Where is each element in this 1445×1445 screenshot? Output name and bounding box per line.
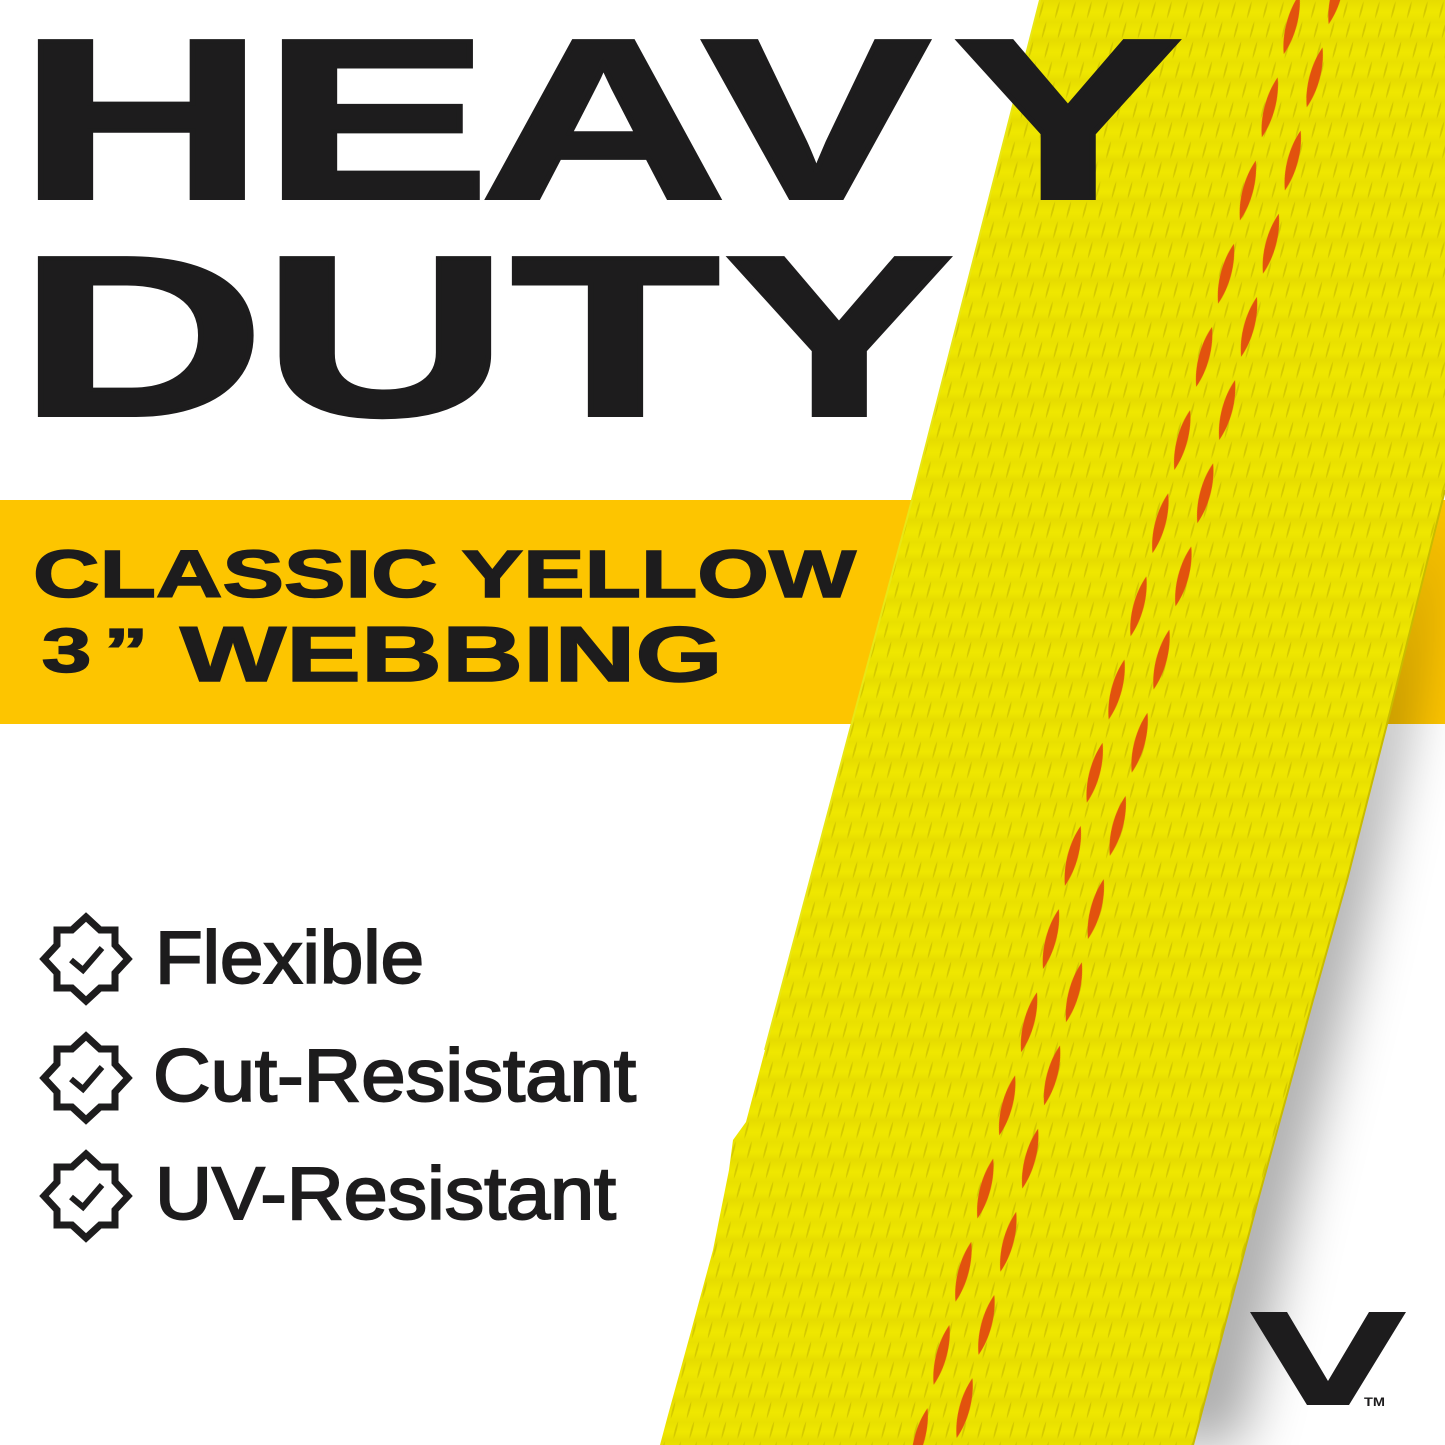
logo: V mark	[1250, 1312, 1406, 1405]
strap right edge	[1193, 490, 1445, 1445]
banner heading: 3 inch webbing: WEBBING	[180, 611, 723, 698]
trademark: TM	[1364, 1395, 1385, 1409]
label: UV-Resistant	[155, 1152, 616, 1235]
orange stitch line right	[935, 0, 1348, 1445]
icon: check badge	[44, 1036, 128, 1120]
icon: check badge	[44, 917, 128, 1001]
strap drop shadow	[1150, 490, 1445, 1445]
yellow banner background	[0, 500, 1445, 724]
feature: Flexible	[44, 916, 424, 1001]
label: Cut-Resistant	[153, 1034, 636, 1117]
feature: Cut-Resistant	[44, 1034, 636, 1120]
yellow webbing strap	[660, 0, 1445, 1445]
strap left edge highlight	[765, 0, 1040, 1050]
strap body with woven texture	[660, 0, 1445, 1445]
brand logo	[1250, 1312, 1406, 1409]
orange stitch line left	[898, 0, 1311, 1445]
banner heading: 3 inch webbing: 3”	[42, 616, 148, 686]
icon: check badge	[44, 1154, 128, 1238]
label: Flexible	[155, 916, 424, 999]
title: DUTY: DUTY	[18, 209, 953, 464]
feature: UV-Resistant	[44, 1152, 616, 1238]
banner heading: classic yellow: CLASSIC YELLOW	[33, 537, 857, 612]
